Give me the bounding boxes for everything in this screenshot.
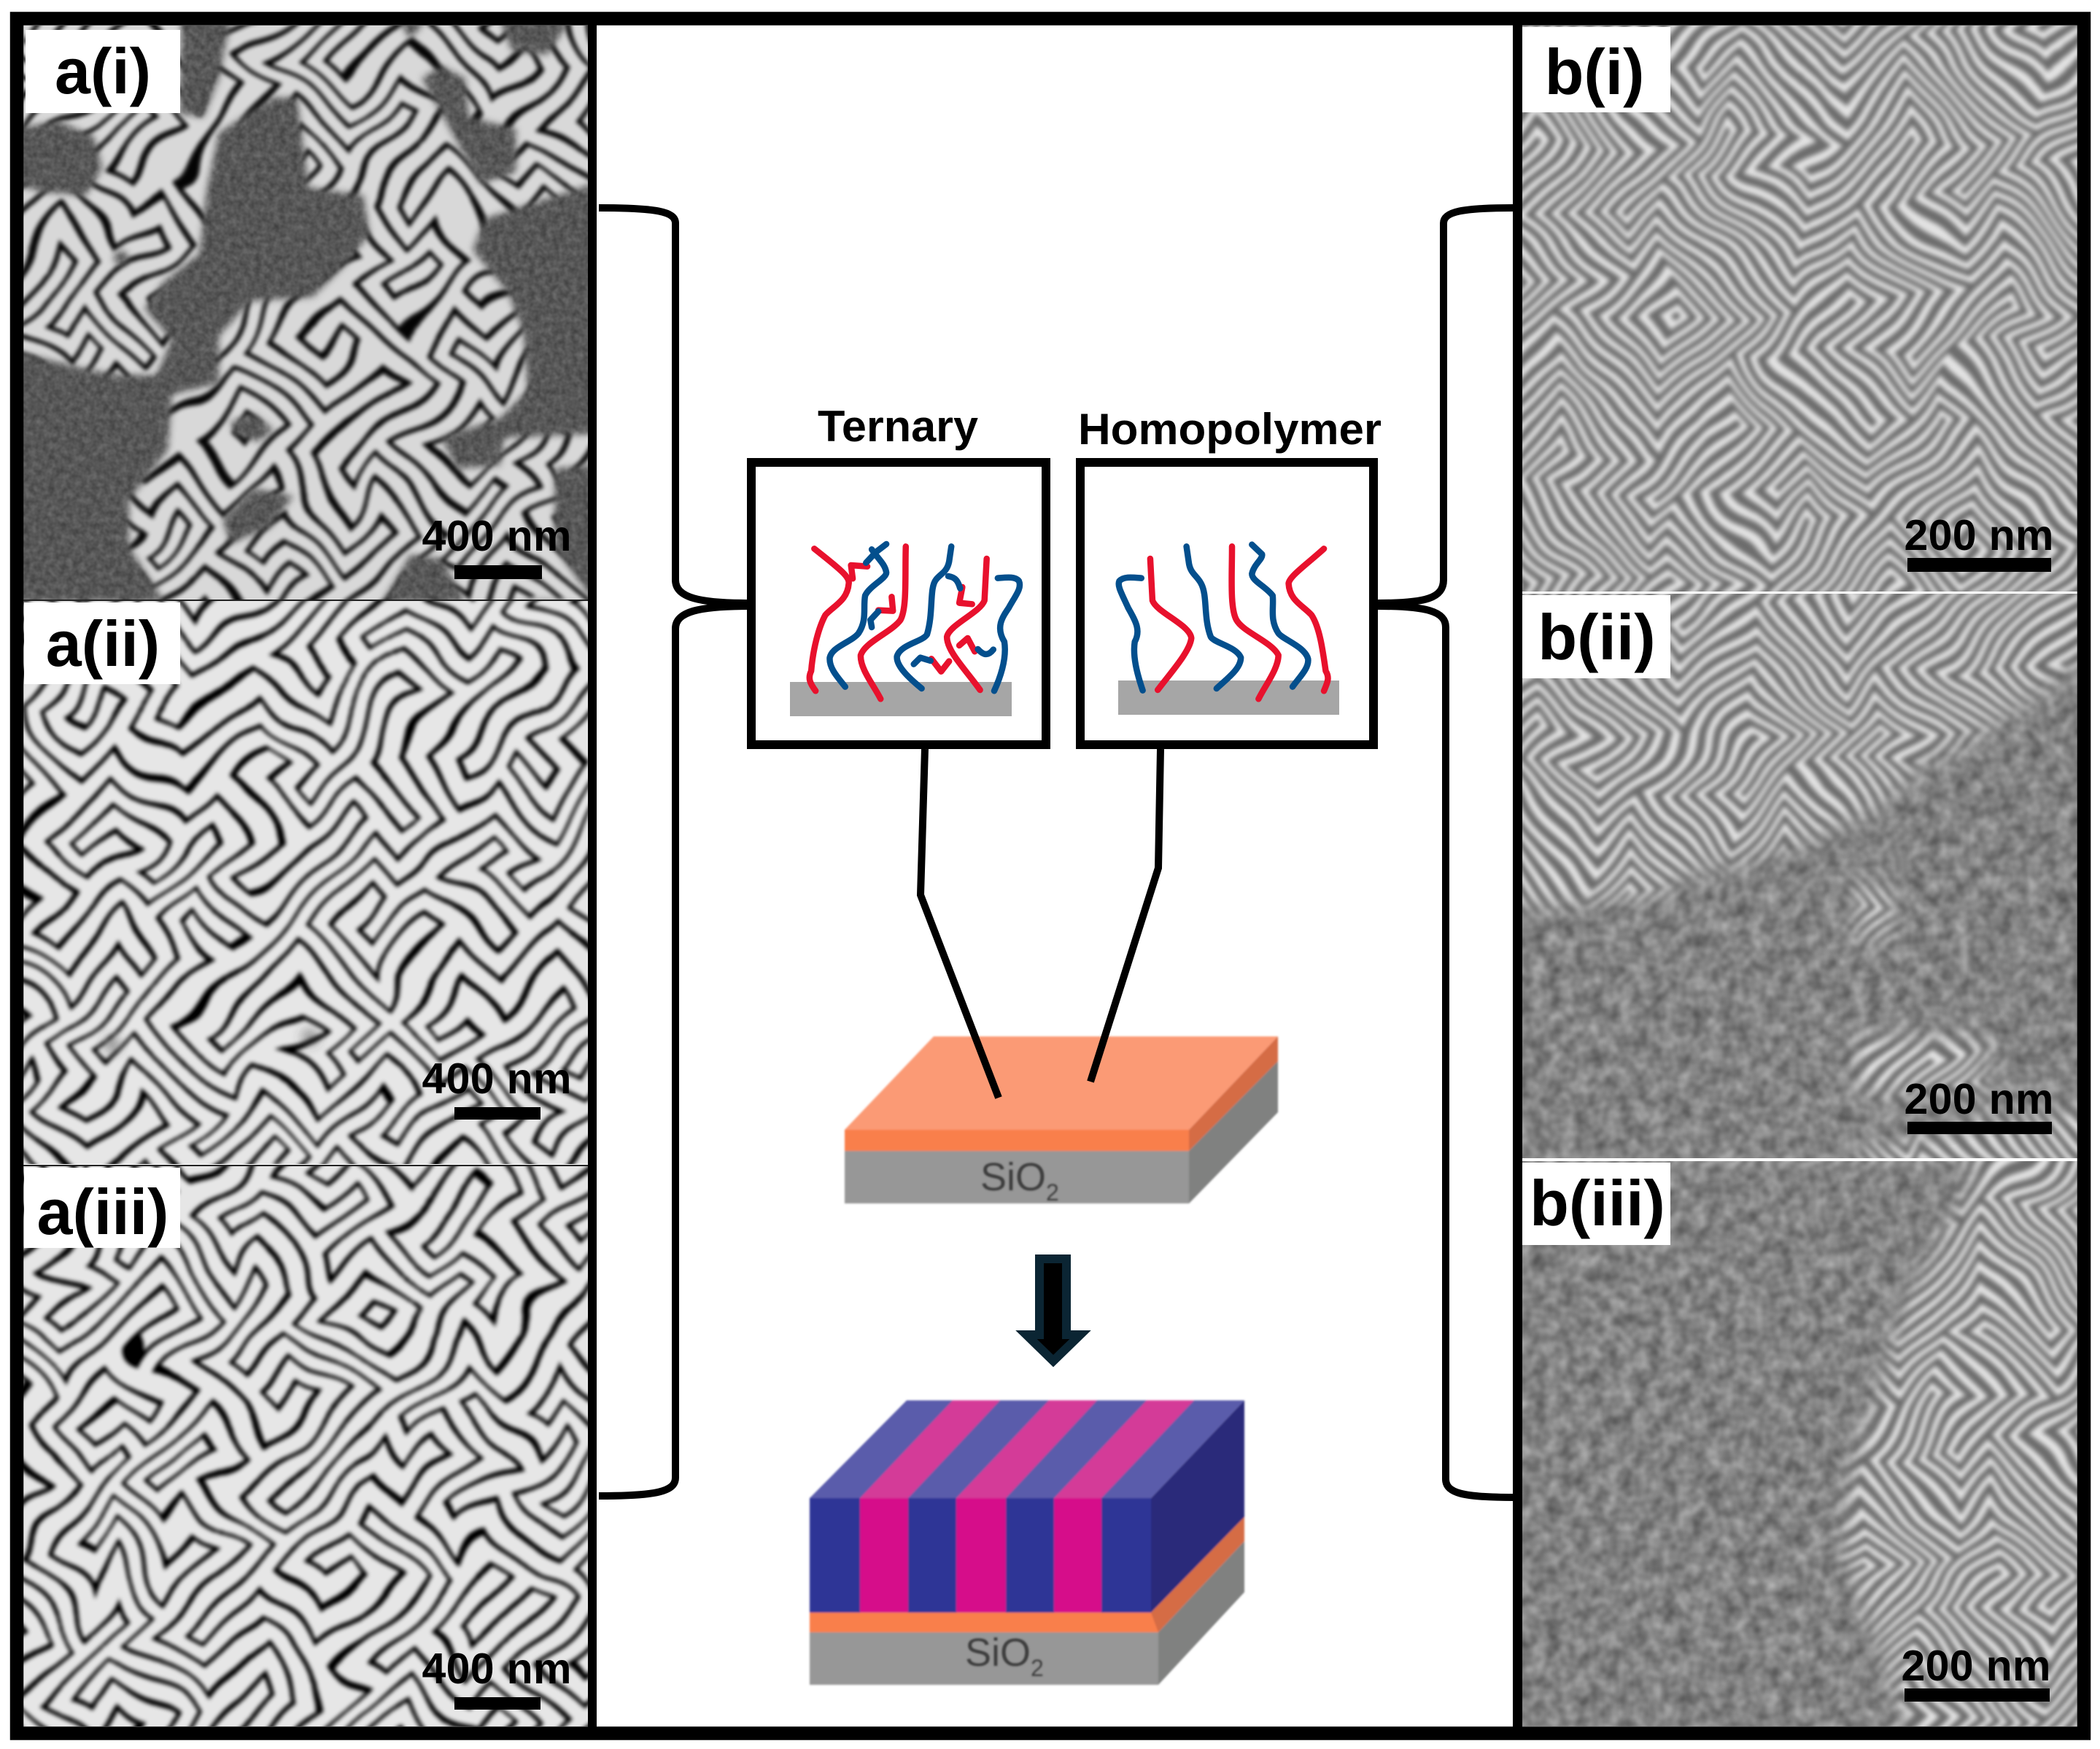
scale bar 400 nm: 400 nm: [422, 512, 572, 560]
panel: a(i) micrograph: [23, 26, 588, 600]
arrow: down: [1026, 1259, 1080, 1361]
label a(i): a(i): [55, 35, 151, 107]
substrate slab before annealing: [845, 1036, 1278, 1206]
micrograph texture b(ii): [1522, 594, 2077, 1158]
scale bar 400 nm: 400 nm: [422, 1055, 572, 1103]
label SiO2: 2: [1031, 1655, 1044, 1681]
label SiO2: SiO: [980, 1155, 1046, 1199]
polymer chains: [810, 544, 1020, 699]
box frame: [751, 462, 1046, 745]
label a(ii): a(ii): [46, 608, 160, 680]
scale bar 200 nm: 200 nm: [1904, 1075, 2054, 1123]
panel: homopolymer brush schematic: [1080, 462, 1373, 745]
label SiO2: SiO: [965, 1631, 1031, 1675]
panel: b(i) micrograph: [1522, 26, 2077, 592]
heading: Ternary: Ternary: [818, 402, 979, 451]
panel: b(ii) micrograph: [1522, 594, 2077, 1158]
label b(ii): b(ii): [1538, 601, 1656, 673]
label b(i): b(i): [1545, 36, 1644, 108]
scale bar 200 nm: 200 nm: [1901, 1642, 2051, 1690]
micrograph texture b(iii): [1522, 1161, 2077, 1726]
micrograph texture a(iii): [23, 1166, 588, 1726]
micrograph texture a(i): [23, 26, 588, 600]
micrograph texture b(i): [1522, 26, 2077, 592]
scale bar 200 nm: 200 nm: [1904, 511, 2054, 559]
heading: Homopolymer: Homopolymer: [1078, 405, 1382, 454]
label a(ii): [24, 602, 180, 684]
label SiO2: 2: [1046, 1179, 1059, 1206]
panel: ternary brush schematic: [751, 462, 1046, 745]
label a(i): [26, 30, 180, 113]
label b(i): [1522, 27, 1670, 112]
connector line from ternary box to slab: [921, 749, 999, 1098]
connector line from homopolymer box to slab: [1090, 749, 1161, 1082]
substrate: [1118, 680, 1339, 715]
left bracket: [599, 208, 750, 1496]
polymer chains: [1119, 545, 1328, 699]
panel: b(iii) micrograph: [1522, 1161, 2077, 1726]
panel: a(ii) micrograph: [23, 601, 588, 1164]
panel: a(iii) micrograph: [23, 1166, 588, 1726]
box frame: [1080, 462, 1373, 745]
label b(iii): b(iii): [1530, 1167, 1665, 1239]
label a(iii): a(iii): [37, 1176, 168, 1248]
striped block copolymer film on slab: [810, 1400, 1244, 1685]
film block shape: [810, 1400, 1244, 1685]
label b(ii): [1522, 595, 1670, 678]
scale bar 400 nm: 400 nm: [422, 1645, 572, 1693]
micrograph texture a(ii): [23, 601, 588, 1164]
substrate: [790, 682, 1012, 716]
right bracket: [1378, 208, 1514, 1497]
slab shape: [845, 1036, 1278, 1203]
